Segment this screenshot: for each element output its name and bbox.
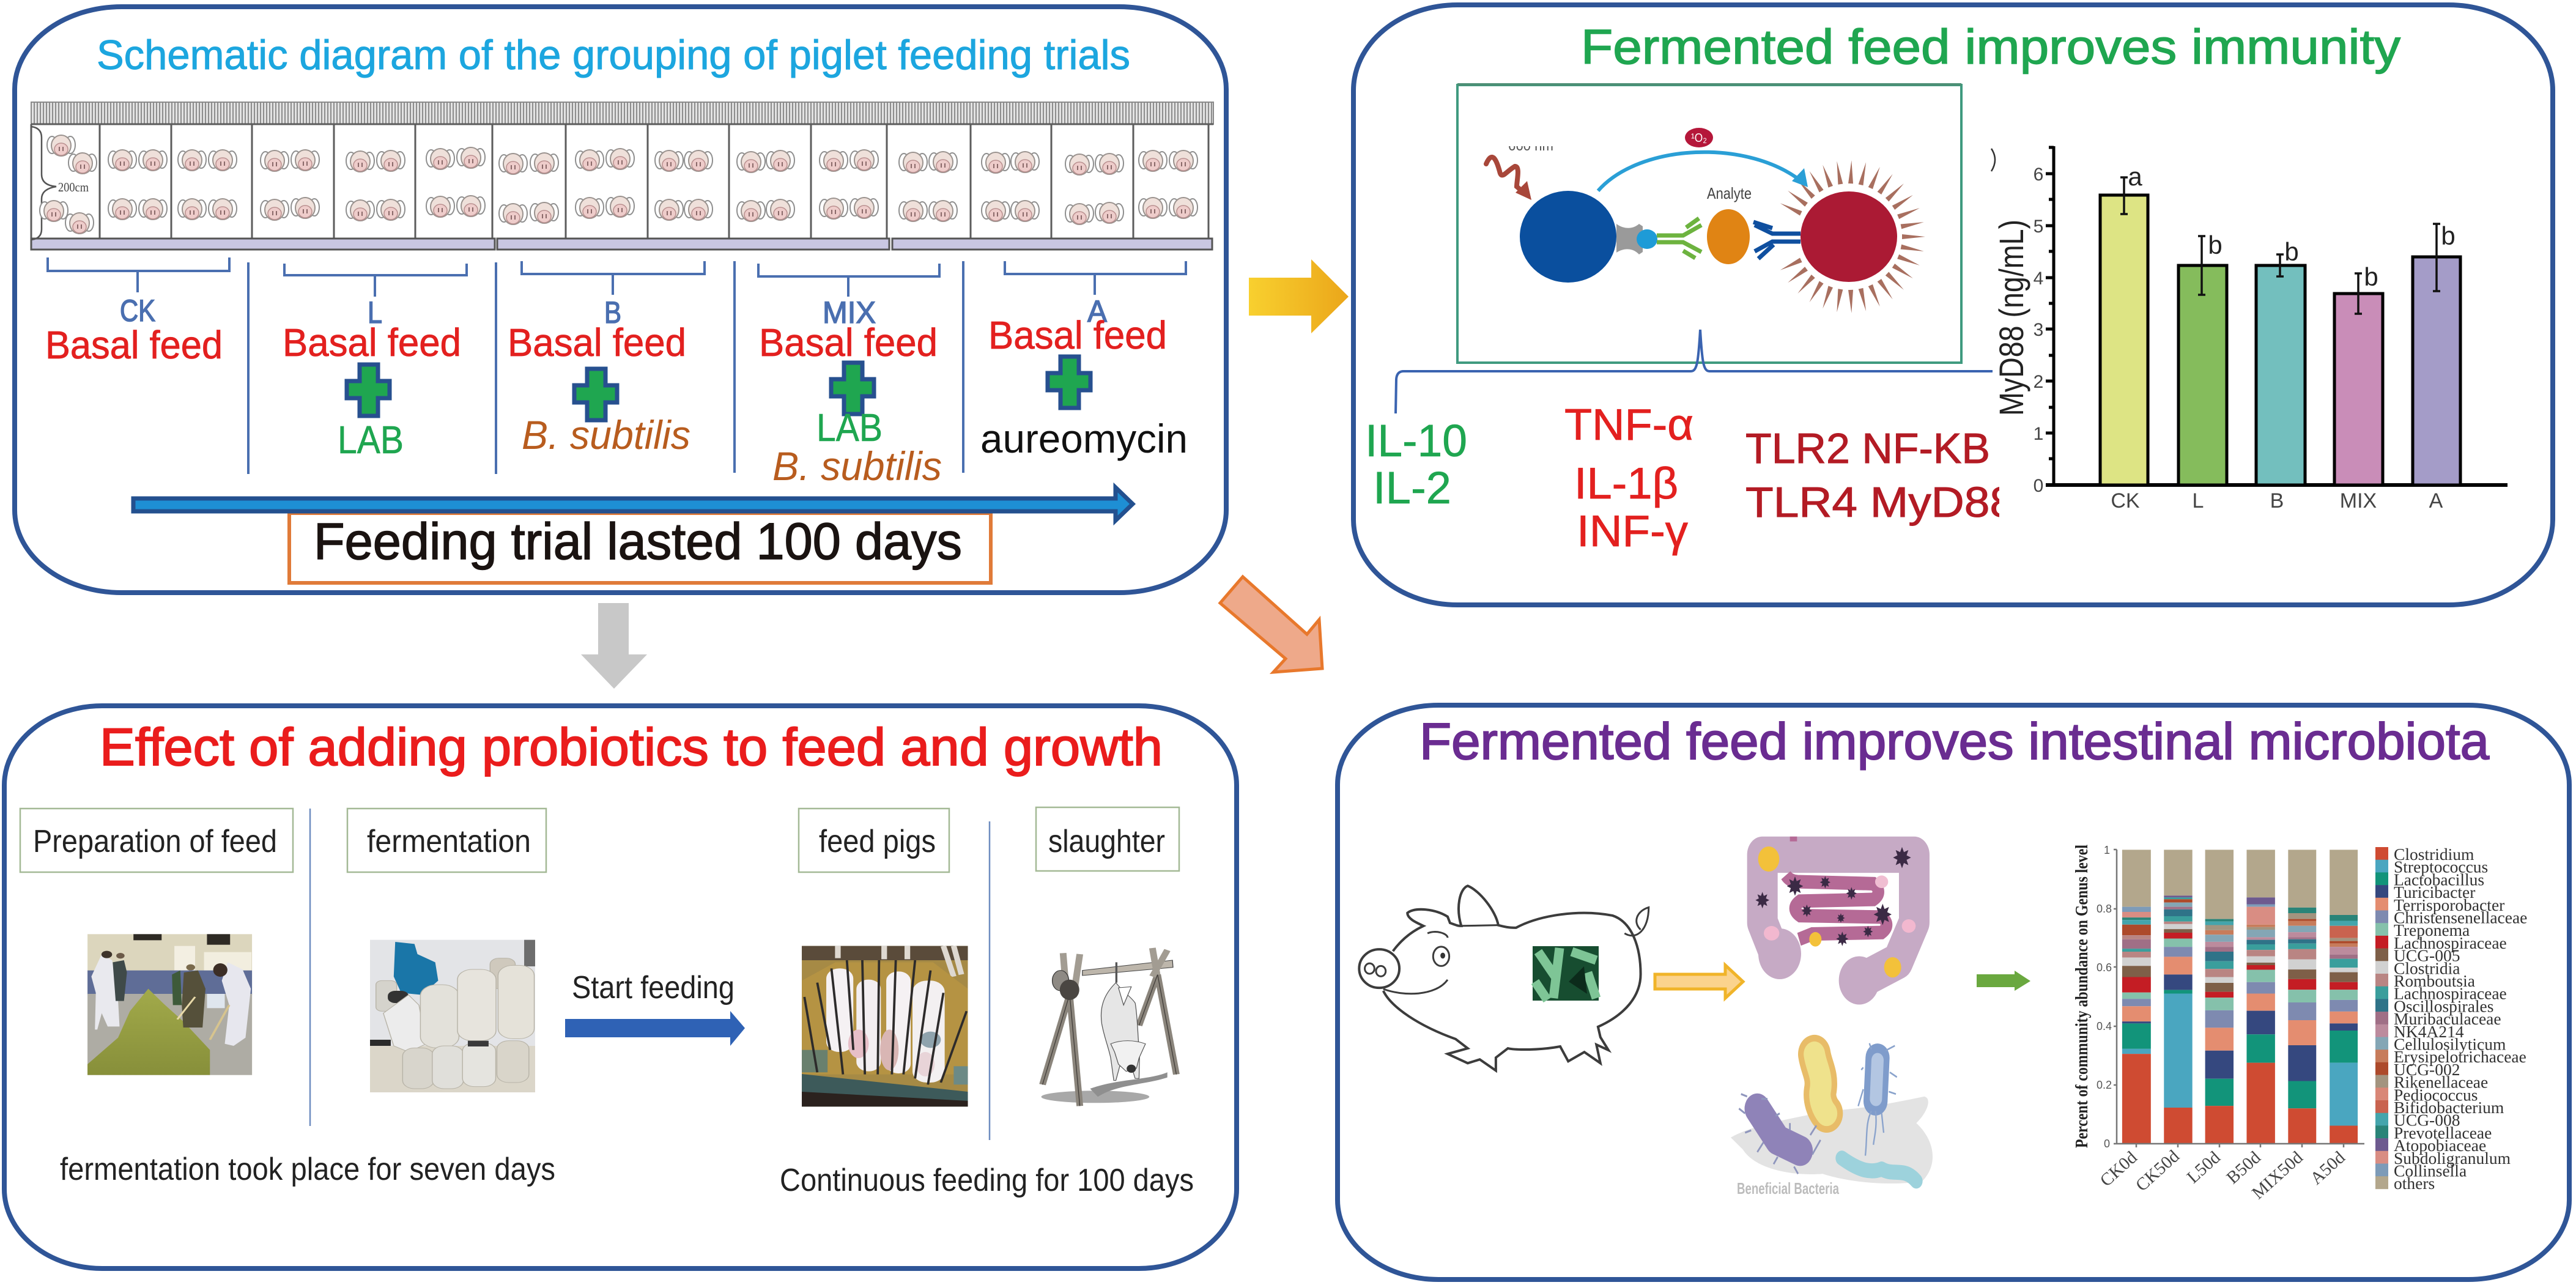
illustration: slaughter sketch xyxy=(1041,948,1176,1106)
pen rack diagram xyxy=(31,102,1213,250)
pro-inflammatory cytokines: TNF-α xyxy=(1564,401,1693,450)
signalling genes xyxy=(1746,433,1999,526)
bar chart: MyD88: L xyxy=(2193,489,2204,513)
group: CK: CK xyxy=(120,294,155,328)
heading: microbiota: Fermented feed improves intestinal microbiota xyxy=(1419,713,2489,770)
legend: Oscillospirales xyxy=(2394,996,2493,1015)
arrow: yellow to immunity panel xyxy=(1249,259,1349,333)
bar chart: MyD88: 5 xyxy=(2034,217,2043,237)
group: A with aureomycin xyxy=(980,294,1188,461)
legend: UCG-002 xyxy=(2394,1060,2460,1079)
panel: piglet feeding trial grouping xyxy=(15,7,1226,593)
group: CK xyxy=(45,294,223,367)
illustration: intestine with microbes xyxy=(1755,837,1915,1005)
legend: Atopobiaceae xyxy=(2394,1136,2486,1155)
step: slaughter: slaughter xyxy=(1048,824,1165,859)
group: B with B. subtilis xyxy=(508,295,690,457)
anti-inflammatory cytokines xyxy=(1365,415,1467,513)
arrow: gut to chart xyxy=(1977,971,2030,991)
bar chart: MyD88: CK xyxy=(2111,489,2140,513)
bar chart: MyD88: 2 xyxy=(2034,372,2043,392)
bar chart: MyD88: 3 xyxy=(2034,320,2043,340)
diagram: analyte assay in green frame xyxy=(1457,83,1961,363)
legend: Bifidobacterium xyxy=(2394,1098,2504,1117)
illustration: beneficial bacteria: Beneficial Bacteria xyxy=(1737,1179,1839,1198)
step: slaughter xyxy=(1036,807,1179,871)
anti-inflammatory cytokines: IL-2 xyxy=(1373,462,1451,513)
legend: Erysipelotrichaceae xyxy=(2394,1047,2526,1066)
stacked bar chart: genus abundance: 0.2 xyxy=(2097,1079,2112,1091)
arrow: trial timeline xyxy=(133,487,1133,520)
group: B with B. subtilis: B. subtilis xyxy=(522,412,690,457)
legend: Lactobacillus xyxy=(2394,870,2484,889)
illustration: beneficial bacteria xyxy=(1731,1043,1933,1198)
anti-inflammatory cytokines: IL-10 xyxy=(1365,415,1467,466)
diagram: analyte assay in green frame: ¹O₂ xyxy=(1691,131,1707,145)
bar chart: MyD88: 1 xyxy=(2034,424,2043,444)
callout: feeding trial duration: Feeding trial lasted 100 days xyxy=(314,513,962,570)
legend xyxy=(2375,845,2527,1193)
panel: intestinal microbiota xyxy=(1338,705,2569,1279)
bar chart: MyD88: b xyxy=(2208,231,2223,259)
caption: start feeding with arrow xyxy=(565,970,745,1046)
stacked bar chart: genus abundance: A50d xyxy=(2306,1147,2349,1188)
bar chart: MyD88: B xyxy=(2270,489,2284,513)
bar chart: MyD88: 0 xyxy=(2034,476,2043,496)
group: L with LAB xyxy=(283,295,461,462)
stacked bar chart: genus abundance: 1 xyxy=(2104,844,2110,856)
legend: UCG-008 xyxy=(2394,1111,2460,1130)
legend: Cellulosilyticum xyxy=(2394,1035,2506,1053)
group: MIX with LAB and B. subtilis: Basal feed xyxy=(759,320,938,365)
stacked bar chart: genus abundance: B50d xyxy=(2223,1147,2265,1188)
stacked bar chart: genus abundance: 0.6 xyxy=(2097,961,2112,974)
pro-inflammatory cytokines: IL-1β xyxy=(1574,459,1678,508)
stacked bar chart: genus abundance: MIX50d xyxy=(2248,1147,2307,1203)
arrow: orange to microbiota panel xyxy=(1220,577,1322,672)
photo: feed preparation xyxy=(87,934,252,1075)
heading: probiotics and growth: Effect of adding probiotics to feed and growth xyxy=(100,718,1163,777)
arrow: pig to gut xyxy=(1655,965,1743,998)
stacked bar chart: genus abundance: CK50d xyxy=(2132,1146,2183,1195)
group: A with aureomycin: A xyxy=(1087,294,1108,328)
legend: Romboutsia xyxy=(2394,971,2475,990)
bar chart: MyD88 xyxy=(1991,146,2508,513)
stacked bar chart: genus abundance: CK0d xyxy=(2097,1147,2141,1191)
photo: fermentation drums xyxy=(370,940,535,1092)
axis label: Percent of community abundance on Genus level xyxy=(2073,845,2092,1148)
legend: Turicibacter xyxy=(2394,883,2475,902)
group: L with LAB: Basal feed xyxy=(283,320,461,365)
bar chart: MyD88: 6 xyxy=(2034,165,2043,185)
group: L with LAB: L xyxy=(368,295,382,330)
stacked bar chart: genus abundance: L50d xyxy=(2183,1147,2224,1187)
legend: Pediococcus xyxy=(2394,1085,2478,1104)
legend: Subdoligranulum xyxy=(2394,1149,2511,1168)
step: feed pigs: feed pigs xyxy=(819,824,936,859)
diagram: analyte assay in green frame: 660 nm xyxy=(1508,138,1553,154)
stacked bar chart: genus abundance: 0 xyxy=(2104,1138,2110,1150)
caption: start feeding with arrow: Start feeding xyxy=(572,970,735,1005)
panel: fermented feed improves immunity xyxy=(1353,5,2553,605)
bar chart: MyD88: A xyxy=(2429,489,2443,513)
legend: others xyxy=(2394,1174,2435,1193)
bar chart: MyD88: b xyxy=(2441,221,2456,250)
group: MIX with LAB and B. subtilis: B. subtilis xyxy=(772,443,942,489)
caption: feeding duration: Continuous feeding for 100 days xyxy=(780,1163,1194,1198)
legend: Clostridia xyxy=(2394,958,2460,977)
legend: UCG-005 xyxy=(2394,946,2460,965)
bar chart: MyD88: b xyxy=(2364,262,2378,291)
bar chart: MyD88: MyD88 (ng/mL) xyxy=(1992,220,2030,416)
legend: Lachnospiraceae xyxy=(2394,984,2507,1003)
pro-inflammatory cytokines xyxy=(1564,401,1693,556)
group: B with B. subtilis: B xyxy=(604,295,621,330)
group: A with aureomycin: Basal feed xyxy=(988,313,1167,357)
legend: Treponema xyxy=(2394,920,2470,939)
group: MIX with LAB and B. subtilis xyxy=(759,295,942,489)
legend: NK4A214 xyxy=(2394,1022,2464,1041)
group: B with B. subtilis: Basal feed xyxy=(508,320,686,365)
group: MIX with LAB and B. subtilis: LAB xyxy=(816,405,883,450)
signalling genes: TLR4 MyD88 xyxy=(1745,478,2015,526)
step: preparation of feed xyxy=(20,809,293,872)
bar chart: MyD88: 4 xyxy=(2034,268,2043,289)
group brackets and dividers xyxy=(48,257,1186,474)
legend: Lachnospiraceae xyxy=(2394,933,2507,952)
step: feed pigs xyxy=(799,809,949,872)
stacked bar chart: genus abundance: 0.4 xyxy=(2097,1020,2112,1032)
panel: effect of probiotics on growth xyxy=(4,706,1237,1268)
legend: Rikenellaceae xyxy=(2394,1073,2488,1092)
group: A with aureomycin: aureomycin xyxy=(980,416,1188,461)
step: fermentation xyxy=(347,809,546,872)
bar chart: MyD88: MIX xyxy=(2340,489,2377,513)
legend: Streptococcus xyxy=(2394,857,2488,876)
legend: Muribaculaceae xyxy=(2394,1009,2501,1028)
pro-inflammatory cytokines: INF-γ xyxy=(1577,507,1688,556)
signalling genes: TLR2 NF-KB xyxy=(1745,424,1990,472)
legend: Prevotellaceae xyxy=(2394,1123,2492,1142)
group: CK: Basal feed xyxy=(45,323,223,367)
group: MIX with LAB and B. subtilis: MIX xyxy=(823,295,876,330)
image: bacteria micrograph xyxy=(1533,946,1599,1001)
step: fermentation: fermentation xyxy=(367,824,531,859)
step: preparation of feed: Preparation of feed xyxy=(33,824,277,859)
legend: Collinsella xyxy=(2394,1161,2467,1180)
heading: immunity: Fermented feed improves immunity xyxy=(1581,20,2400,74)
photo: pigs in pen xyxy=(802,946,968,1106)
pen rack diagram: 200cm xyxy=(58,180,89,194)
arrow: grey down to growth panel xyxy=(581,603,647,689)
legend: Terrisporobacter xyxy=(2394,895,2504,914)
diagram: analyte assay in green frame: Analyte xyxy=(1707,184,1752,202)
bar chart: MyD88: a xyxy=(2128,162,2142,191)
legend: Christensenellaceae xyxy=(2394,908,2527,927)
bar chart: MyD88: b xyxy=(2284,237,2299,266)
group: L with LAB: LAB xyxy=(338,418,404,462)
stacked bar chart: genus abundance: 0.8 xyxy=(2097,903,2112,915)
caption: fermentation duration: fermentation took place for seven days xyxy=(60,1152,555,1187)
legend: Clostridium xyxy=(2394,845,2474,864)
illustration: pig outline xyxy=(1359,886,1649,1070)
stacked bar chart: genus abundance xyxy=(2073,844,2527,1203)
heading: schematic diagram: Schematic diagram of the grouping of piglet feeding trials xyxy=(97,32,1130,78)
bracket line xyxy=(1396,330,1993,413)
